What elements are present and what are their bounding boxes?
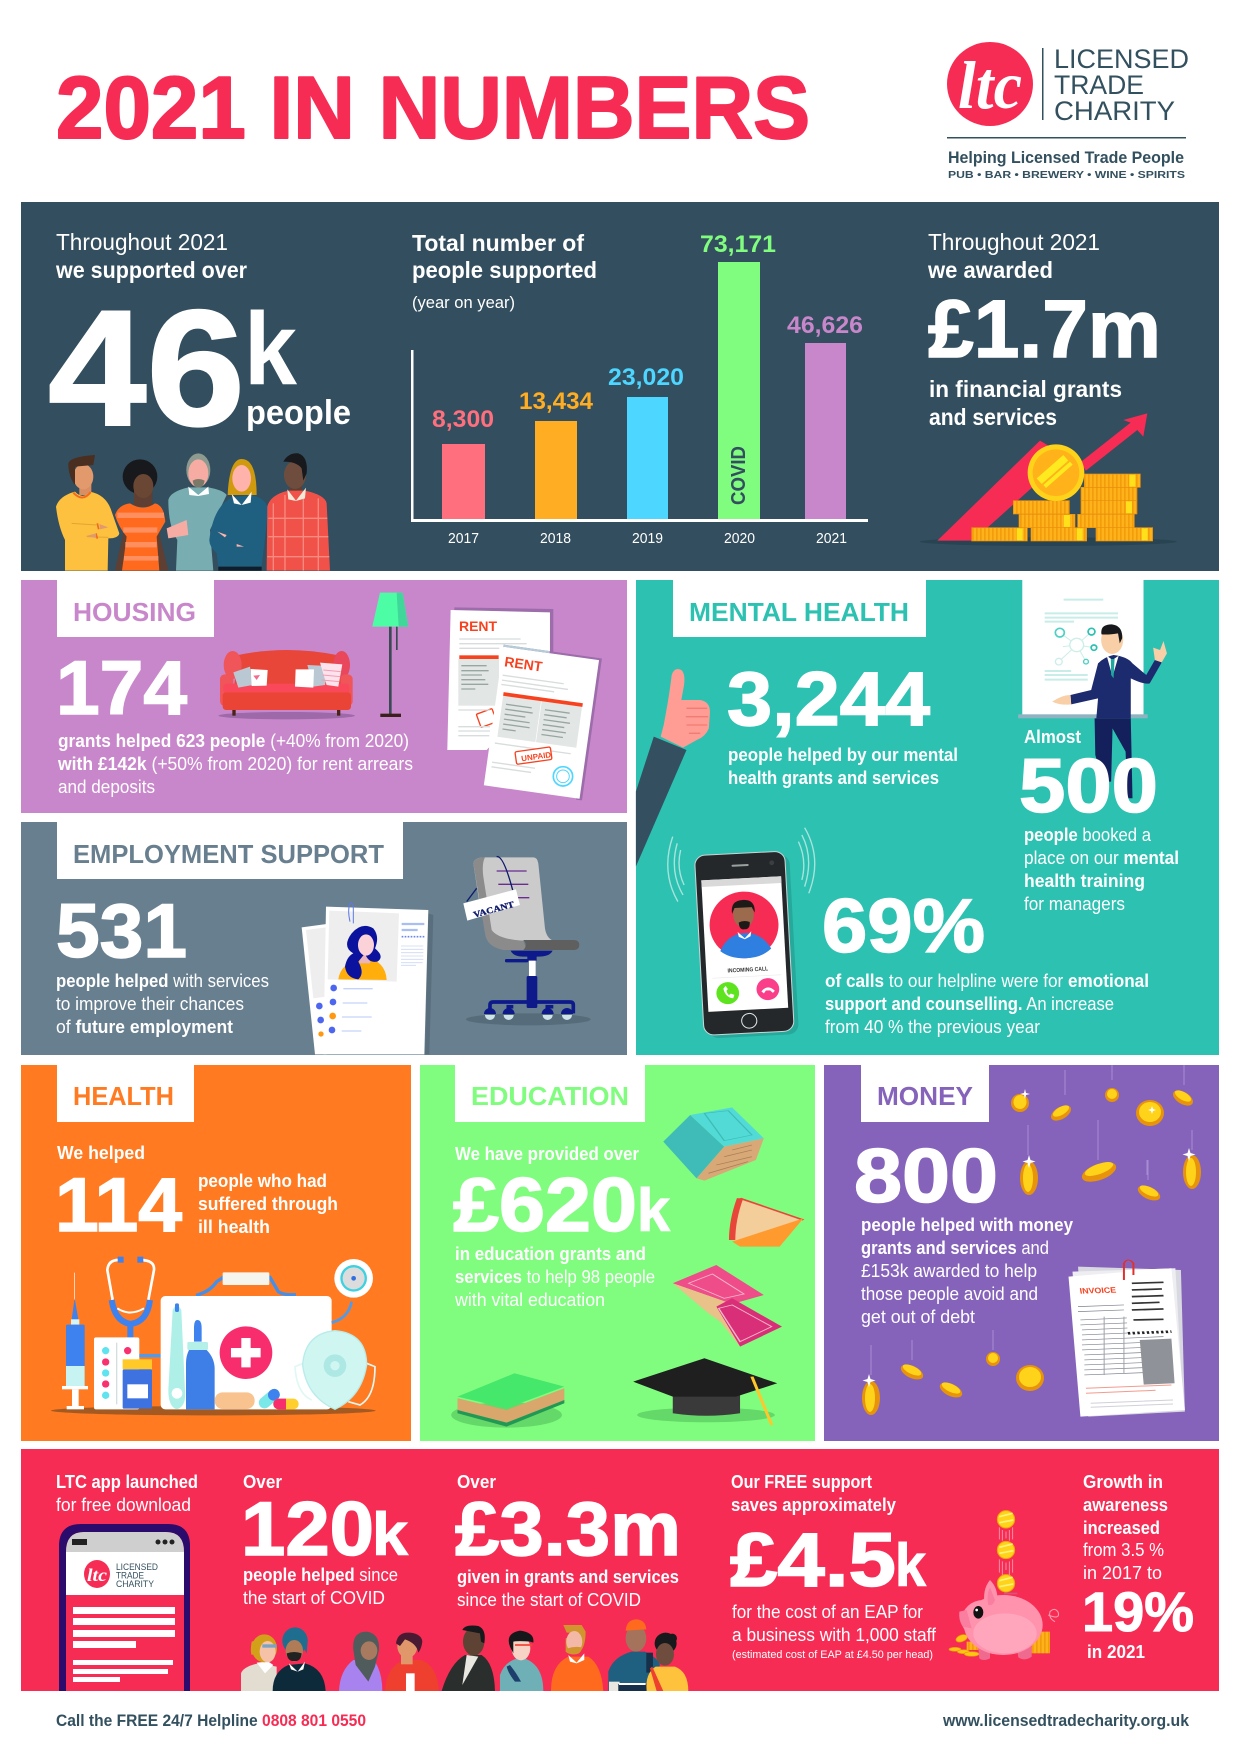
- stat: free support saves £4.5k: [730, 1472, 937, 1661]
- illustration: ringing phone: INCOMING CALL: [727, 966, 769, 974]
- heading: employment support: EMPLOYMENT SUPPORT: [73, 839, 384, 869]
- stat: 46k people: k: [244, 291, 298, 406]
- heading: money: MONEY: [877, 1081, 973, 1111]
- stat: we helped 114: people who had: [198, 1171, 327, 1191]
- illustration: phone app: CHARITY: [116, 1579, 155, 1590]
- stat: growth in awareness 19%: Growth in: [1083, 1472, 1163, 1492]
- panel: employment support: [21, 822, 627, 1055]
- stat: over 120k: Over: [243, 1472, 282, 1492]
- stat: £620k: We have provided over: [455, 1144, 639, 1164]
- text: money detail: people helped with money: [861, 1215, 1073, 1235]
- text: money detail: grants and services and: [861, 1238, 1049, 1258]
- bar chart: people supported year on year: Total number of: [412, 230, 584, 256]
- text: housing detail: and deposits: [58, 777, 155, 797]
- illustration: medical kit: [51, 1257, 376, 1415]
- stat: over £3.3m: Over: [457, 1472, 496, 1492]
- stat: over 120k: the start of COVID: [243, 1588, 385, 1608]
- footer: helpline: Call the FREE 24/7 Helpline 0808 801 0550: [56, 1712, 366, 1730]
- text: money detail: those people avoid and: [861, 1284, 1038, 1304]
- heading: health: HEALTH: [73, 1081, 174, 1111]
- text: housing detail: with £142k (+50% from 2020) for rent arrears: [57, 754, 413, 774]
- illustration: coins and rising arrow: [920, 413, 1177, 546]
- bar 2018: [519, 388, 594, 547]
- illustration: phone app: [59, 1524, 190, 1691]
- heading: money: [861, 1065, 989, 1122]
- stat: growth in awareness 19%: increased: [1083, 1518, 1160, 1538]
- illustration: flying books and graduation cap: [451, 1107, 803, 1428]
- logo: Licensed Trade Charity: PUB • BAR • BREWERY • WINE • SPIRITS: [948, 169, 1185, 181]
- stat: 531: 531: [56, 889, 187, 974]
- stat: growth in awareness 19%: in 2017 to: [1083, 1563, 1162, 1583]
- text: education detail: with vital education: [454, 1290, 605, 1310]
- stat: £1.7m awarded: Throughout 2021: [928, 229, 1100, 255]
- text: training detail: for managers: [1024, 894, 1125, 914]
- text: housing detail: [57, 731, 413, 797]
- text: education detail: in education grants and: [455, 1244, 646, 1264]
- illustration: invoice: INVOICE: [1079, 1286, 1117, 1296]
- text: education detail: services to help 98 people: [455, 1267, 655, 1287]
- bar 2017: [432, 406, 494, 547]
- illustration: sofa, lamp and rent letters: [218, 593, 602, 800]
- stat: 46k people: [48, 276, 351, 460]
- stat: 800: 800: [854, 1134, 998, 1219]
- stat: free support saves £4.5k: for the cost of an EAP for: [732, 1602, 923, 1622]
- stat: free support saves £4.5k: a business with 1,000 staff: [732, 1625, 937, 1645]
- bar 2019: [608, 364, 684, 547]
- stat: over 120k: k: [372, 1501, 409, 1568]
- stat: we helped 114: 114: [55, 1163, 182, 1248]
- stat: free support saves £4.5k: k: [895, 1532, 927, 1599]
- stat: growth in awareness 19%: [1082, 1472, 1194, 1662]
- text: supported intro: [55, 229, 247, 283]
- illustration: presenter and whiteboard: [1018, 580, 1167, 798]
- stat: £620k: k: [637, 1177, 671, 1244]
- stat: over £3.3m: [455, 1472, 681, 1610]
- stat: £1.7m awarded: £1.7m: [928, 284, 1161, 375]
- stat: over £3.3m: given in grants and services: [457, 1567, 679, 1587]
- stat: over 120k: people helped since: [243, 1565, 398, 1585]
- bar 2019: 2019: [632, 531, 663, 547]
- logo: Licensed Trade Charity: ltc: [958, 47, 1022, 123]
- stat: free support saves £4.5k: (estimated cost of EAP at £4.50 per head): [732, 1649, 933, 1661]
- text: training detail: people booked a: [1024, 825, 1152, 845]
- text: grants and services: health grants and services: [728, 768, 939, 788]
- heading: mental health: MENTAL HEALTH: [689, 597, 909, 627]
- stat: £1.7m awarded: in financial grants: [929, 376, 1122, 402]
- stat: free support saves £4.5k: £4.5: [730, 1518, 896, 1603]
- text: training detail: place on our mental: [1024, 848, 1179, 868]
- heading: education: EDUCATION: [471, 1081, 629, 1111]
- heading: health: [57, 1065, 194, 1122]
- stat: we helped 114: We helped: [57, 1143, 145, 1163]
- text: employment detail: [56, 971, 269, 1037]
- stat: 69%: 69%: [822, 884, 985, 969]
- illustration: invoice: [1069, 1260, 1185, 1417]
- heading: housing: [57, 580, 214, 637]
- stat: £620k: £620: [453, 1163, 637, 1248]
- stat: almost 500: Almost: [1024, 727, 1081, 747]
- bar 2020: COVID: [728, 446, 750, 505]
- text: money detail: [861, 1215, 1073, 1327]
- bar 2019: 23,020: [608, 364, 684, 391]
- text: helpline detail: of calls to our helpline were for emotional: [825, 971, 1149, 991]
- text: money detail: £153k awarded to help: [861, 1261, 1037, 1281]
- stat: 46k people: people: [246, 394, 351, 432]
- app launch: for free download: [56, 1495, 191, 1515]
- panel: mental health: [636, 580, 1219, 1055]
- stat: £1.7m awarded: we awarded: [927, 257, 1053, 283]
- panel: health: [21, 1065, 411, 1441]
- text: training detail: [1024, 825, 1179, 914]
- stat: growth in awareness 19%: awareness: [1083, 1495, 1168, 1515]
- illustration: group of people: [241, 1619, 688, 1691]
- app launch: LTC app launched: [56, 1472, 198, 1492]
- illustration: ringing phone: [668, 828, 815, 1039]
- heading: employment support: [57, 822, 403, 879]
- stat: 3,244: 3,244: [727, 657, 930, 742]
- stat: over £3.3m: since the start of COVID: [457, 1590, 641, 1610]
- stat: over 120k: [241, 1472, 409, 1608]
- heading: mental health: [673, 580, 926, 637]
- stat: growth in awareness 19%: 19%: [1082, 1580, 1194, 1643]
- text: training detail: health training: [1024, 871, 1145, 891]
- bar 2021: [787, 312, 863, 547]
- stat: over 120k: 120: [241, 1487, 374, 1572]
- text: helpline detail: support and counselling. An increase: [825, 994, 1114, 1014]
- bar 2021: 46,626: [787, 312, 863, 339]
- stat: we helped 114: ill health: [198, 1217, 270, 1237]
- bar 2020: 73,171: [700, 231, 776, 258]
- stat: almost 500: 500: [1019, 744, 1158, 829]
- heading: housing: HOUSING: [73, 597, 196, 627]
- illustration: five people: [56, 453, 330, 571]
- logo: Licensed Trade Charity: [947, 42, 1189, 181]
- heading: education: [455, 1065, 645, 1122]
- stat: we helped 114: [55, 1143, 338, 1248]
- text: supported intro: we supported over: [55, 257, 247, 283]
- bar chart: people supported year on year: (year on year): [412, 294, 515, 312]
- stat: growth in awareness 19%: in 2021: [1087, 1642, 1145, 1662]
- footer: website: www.licensedtradecharity.org.uk: [942, 1712, 1190, 1730]
- illustration: CV documents: [302, 903, 433, 1054]
- bar 2017: 2017: [448, 531, 479, 547]
- bar 2017: 8,300: [432, 406, 494, 433]
- bar 2018: 2018: [540, 531, 571, 547]
- stat: free support saves £4.5k: saves approximately: [731, 1495, 896, 1515]
- stat: growth in awareness 19%: from 3.5 %: [1083, 1540, 1164, 1560]
- bar 2020: [700, 231, 776, 547]
- bar chart: people supported year on year: [411, 230, 868, 547]
- text: grants and services: [728, 745, 958, 788]
- text: employment detail: of future employment: [56, 1017, 233, 1037]
- panel: housing: [21, 580, 627, 813]
- text: grants and services: people helped by our mental: [728, 745, 958, 765]
- panel: bottom stats: [21, 1449, 1219, 1691]
- bar 2018: 13,434: [519, 388, 594, 415]
- stat: we helped 114: suffered through: [198, 1194, 338, 1214]
- stat: 46k people: 46: [48, 276, 245, 460]
- illustration: thumbs up: [636, 669, 710, 867]
- logo: Licensed Trade Charity: Helping Licensed Trade People: [948, 148, 1184, 167]
- illustration: sofa, lamp and rent letters: UNPAID: [521, 750, 552, 763]
- logo: Licensed Trade Charity: TRADE: [1054, 70, 1144, 100]
- panel: money: [824, 1065, 1219, 1441]
- illustration: phone app: TRADE: [116, 1570, 144, 1582]
- illustration: phone app: LICENSED: [116, 1562, 158, 1573]
- panel: education: [420, 1065, 815, 1441]
- illustration: sofa, lamp and rent letters: RENT: [503, 653, 544, 675]
- text: helpline detail: [825, 971, 1149, 1037]
- illustration: vacant office chair: [463, 857, 591, 1025]
- stat: £1.7m awarded: and services: [929, 404, 1057, 430]
- illustration: vacant office chair: VACANT: [472, 899, 515, 920]
- bar 2020: 2020: [724, 531, 755, 547]
- logo: Licensed Trade Charity: LICENSED: [1054, 44, 1189, 74]
- bar 2021: 2021: [816, 531, 847, 547]
- text: helpline detail: from 40 % the previous year: [825, 1017, 1040, 1037]
- stat: £1.7m awarded: [927, 229, 1161, 430]
- stat: free support saves £4.5k: Our FREE support: [731, 1472, 872, 1492]
- text: education detail: [454, 1244, 655, 1310]
- text: employment detail: to improve their chances: [56, 994, 244, 1014]
- illustration: piggy bank with coins: [949, 1511, 1059, 1660]
- bar chart: people supported year on year: people supported: [412, 257, 597, 283]
- text: housing detail: grants helped 623 people (+40% from 2020): [58, 731, 409, 751]
- title: 2021 IN NUMBERS: [56, 58, 810, 157]
- panel: overview: [21, 202, 1219, 571]
- illustration: falling coins: [862, 1065, 1201, 1415]
- stat: over £3.3m: £3.3m: [455, 1487, 681, 1572]
- stat: £620k: [453, 1144, 671, 1248]
- illustration: sofa, lamp and rent letters: RENT: [459, 618, 498, 634]
- app launch: [56, 1472, 198, 1691]
- stat: 174: 174: [56, 646, 187, 731]
- text: supported intro: Throughout 2021: [56, 229, 228, 255]
- text: employment detail: people helped with services: [56, 971, 269, 991]
- illustration: phone app: ltc: [87, 1565, 107, 1585]
- logo: Licensed Trade Charity: CHARITY: [1054, 96, 1175, 126]
- text: money detail: get out of debt: [861, 1307, 975, 1327]
